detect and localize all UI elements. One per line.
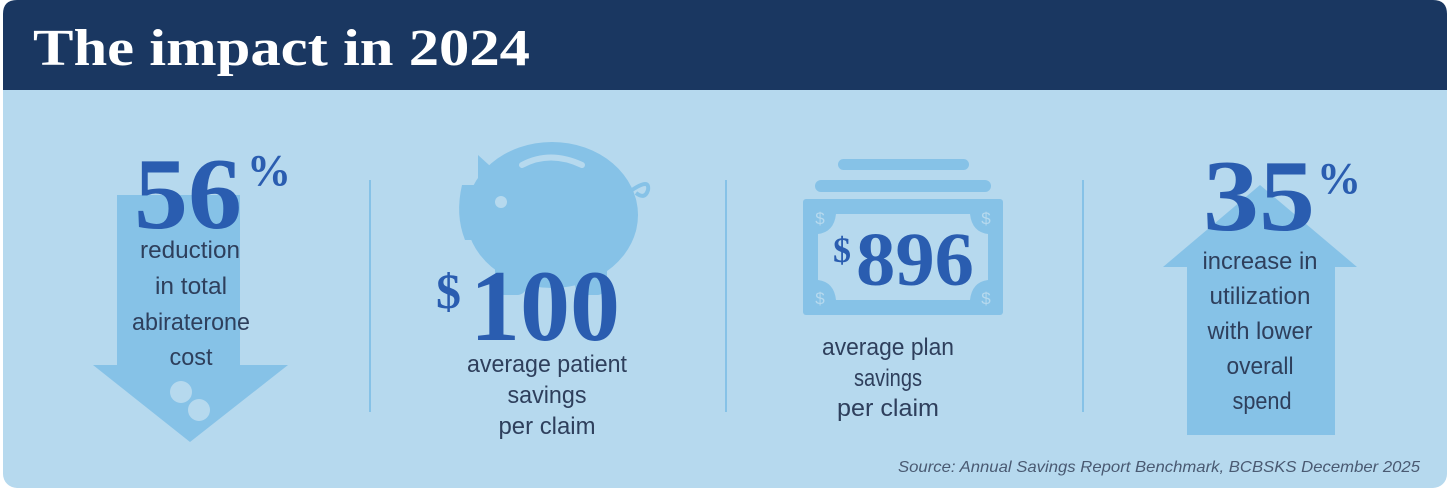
text: average patient savings [467, 351, 627, 440]
text: increase in utilization: increase in [1202, 248, 1318, 275]
stat: 56%: % [247, 146, 291, 195]
panel: $896 plan savings [803, 159, 1003, 422]
text: average plan savings [822, 334, 954, 422]
icon: dollar bill: $ [981, 209, 991, 228]
text: average patient savings: per claim [498, 413, 596, 440]
header bar [3, 0, 1447, 90]
text: increase in utilization: utilization [1210, 283, 1310, 310]
icon: dollar bill [803, 159, 1003, 315]
stat: $896: 896 [856, 218, 974, 302]
stat: 56%: 56 [134, 138, 242, 251]
stat: $100: $ [436, 263, 461, 319]
panel: $100 patient savings [436, 142, 648, 440]
stat: $100: 100 [470, 250, 620, 363]
text: increase in utilization: spend [1232, 388, 1292, 415]
text: average plan savings: average plan [822, 334, 954, 361]
icon: piggy bank [459, 142, 648, 295]
icon: dollar bill: $ [815, 289, 825, 308]
text: increase in utilization: overall [1226, 353, 1294, 380]
text: reduction: abiraterone [132, 309, 250, 336]
panel: 35% increase [1163, 140, 1361, 435]
stat: 35% [1203, 140, 1361, 253]
text: average patient savings: savings [508, 382, 586, 409]
icon: down arrow [93, 195, 288, 442]
text: increase in utilization [1202, 248, 1318, 415]
icon: up arrow [1163, 185, 1357, 435]
text: reduction: reduction [140, 237, 240, 264]
icon: dollar bill: $ [981, 289, 991, 308]
panel: 56% reduction [93, 138, 291, 442]
text: reduction: cost [170, 344, 213, 371]
stat: 35%: 35 [1203, 140, 1315, 253]
text: reduction: in total [155, 273, 227, 300]
text: reduction [132, 237, 250, 371]
text: average plan savings: savings [854, 365, 922, 392]
source note: Source: Annual Savings Report Benchmark, BCBSKS December 2025 [898, 459, 1420, 476]
icon: pills [170, 381, 210, 421]
stat: 56% [134, 138, 291, 251]
text: increase in utilization: with lower [1207, 318, 1313, 345]
text: average patient savings: average patient [467, 351, 627, 378]
icon: dollar bill: $ [815, 209, 825, 228]
stat: 35%: % [1317, 154, 1361, 203]
title: The impact in 2024 [33, 20, 530, 77]
text: average plan savings: per claim [837, 395, 939, 422]
stat: $896: $ [833, 230, 851, 270]
